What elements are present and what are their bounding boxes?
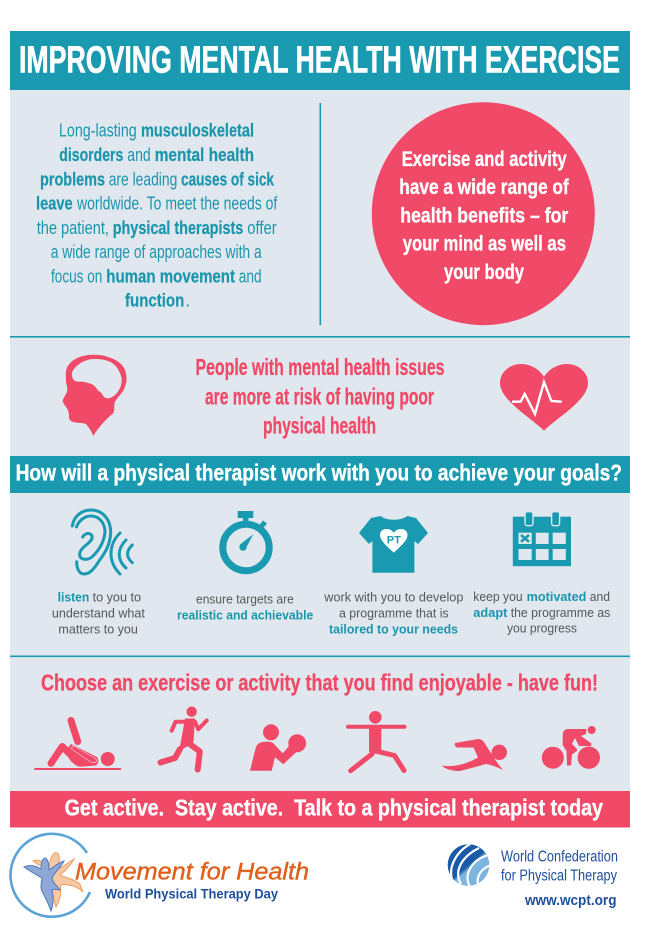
intro text block: Long-lasting	[59, 120, 137, 141]
text: listen: matters to you	[58, 622, 138, 636]
text: programme: a programme that is	[339, 607, 449, 621]
icon: yoga warrior pose	[348, 711, 404, 771]
intro text block: focus on	[51, 265, 102, 286]
intro text block: the patient,	[37, 217, 109, 238]
intro text block: are leading	[109, 169, 177, 190]
callout circle: health benefits: Exercise and activity	[402, 148, 567, 171]
icon: heart with pulse	[500, 364, 588, 431]
text: targets: ensure targets are	[196, 592, 294, 606]
text: programme	[323, 591, 463, 636]
text: listen	[52, 591, 145, 636]
call to action banner	[10, 791, 630, 828]
icon: person with medicine ball	[250, 724, 306, 771]
heading: risk of poor physical health: are more at risk of having poor	[205, 383, 434, 409]
text: listen: understand what	[52, 607, 145, 621]
text: programme: tailored to your needs	[329, 622, 458, 636]
heading: risk of poor physical health: People with mental health issues	[196, 354, 444, 380]
main grey panel	[10, 89, 630, 791]
intro text block: physical therapists	[113, 217, 243, 238]
intro text block: worldwide. To meet the needs of	[76, 193, 278, 214]
intro text block: leave	[36, 193, 73, 214]
icon: sit-up exercise	[34, 720, 121, 770]
section banner: how will a physical therapist work with you	[10, 456, 630, 493]
icon: runner	[160, 706, 207, 770]
logo: Movement for Health: Movement for Health	[75, 858, 309, 885]
text: programme: work with you to develop	[323, 591, 463, 605]
intro text block: musculoskeletal	[141, 120, 254, 141]
intro text block: disorders	[59, 144, 123, 165]
intro text block: mental health	[155, 144, 254, 165]
icon: PT t-shirt	[359, 516, 428, 573]
intro text block: .	[185, 290, 190, 311]
icon: head with brain	[63, 355, 126, 436]
icon: PT t-shirt: PT	[387, 534, 401, 546]
text: motivated: keep you	[473, 590, 523, 604]
text: motivated: you progress	[507, 622, 577, 636]
icon: swimmer	[442, 739, 507, 771]
text: motivated: motivated	[527, 590, 586, 604]
callout circle: health benefits: your body	[444, 261, 524, 284]
logo: Movement for Health	[11, 834, 309, 917]
logo: World Confederation for Physical Therapy: for Physical Therapy	[501, 868, 617, 885]
intro text block: function	[125, 290, 184, 311]
text: listen: listen	[58, 591, 89, 605]
text: motivated: and	[590, 590, 610, 604]
logo: World Confederation for Physical Therapy: www.wcpt.org	[524, 893, 616, 909]
logo: World Confederation for Physical Therapy	[448, 844, 618, 909]
icon: cyclist	[542, 726, 600, 769]
text: motivated	[473, 590, 610, 636]
callout circle: health benefits: your mind as well as	[403, 233, 566, 256]
intro text block: a wide range of approaches with a	[51, 241, 262, 262]
logo: World Confederation for Physical Therapy: World Confederation	[501, 849, 618, 866]
intro text block: causes of sick	[181, 169, 275, 190]
text: motivated: adapt	[473, 606, 508, 620]
intro text block: offer	[247, 217, 277, 238]
text: targets: realistic and achievable	[177, 608, 313, 622]
intro text block	[36, 120, 278, 311]
text: listen: to you to	[93, 591, 141, 605]
heading: risk of poor physical health: physical health	[263, 412, 376, 438]
callout circle: health benefits	[372, 102, 595, 325]
callout circle: health benefits: health benefits – for	[400, 204, 568, 227]
text: motivated: the programme as	[511, 606, 610, 620]
icon: stopwatch	[223, 511, 269, 571]
title banner	[10, 31, 630, 90]
intro text block: human movement	[106, 265, 235, 286]
intro text block: and	[127, 144, 151, 165]
intro text block: and	[239, 265, 262, 286]
text: targets	[177, 592, 313, 622]
callout circle: health benefits: have a wide range of	[399, 176, 570, 199]
heading: risk of poor physical health	[196, 354, 444, 438]
logo: Movement for Health: World Physical Therapy Day	[105, 886, 278, 901]
intro text block: problems	[40, 169, 105, 190]
icon: calendar	[513, 512, 571, 566]
icon: ear with sound waves	[72, 510, 132, 574]
